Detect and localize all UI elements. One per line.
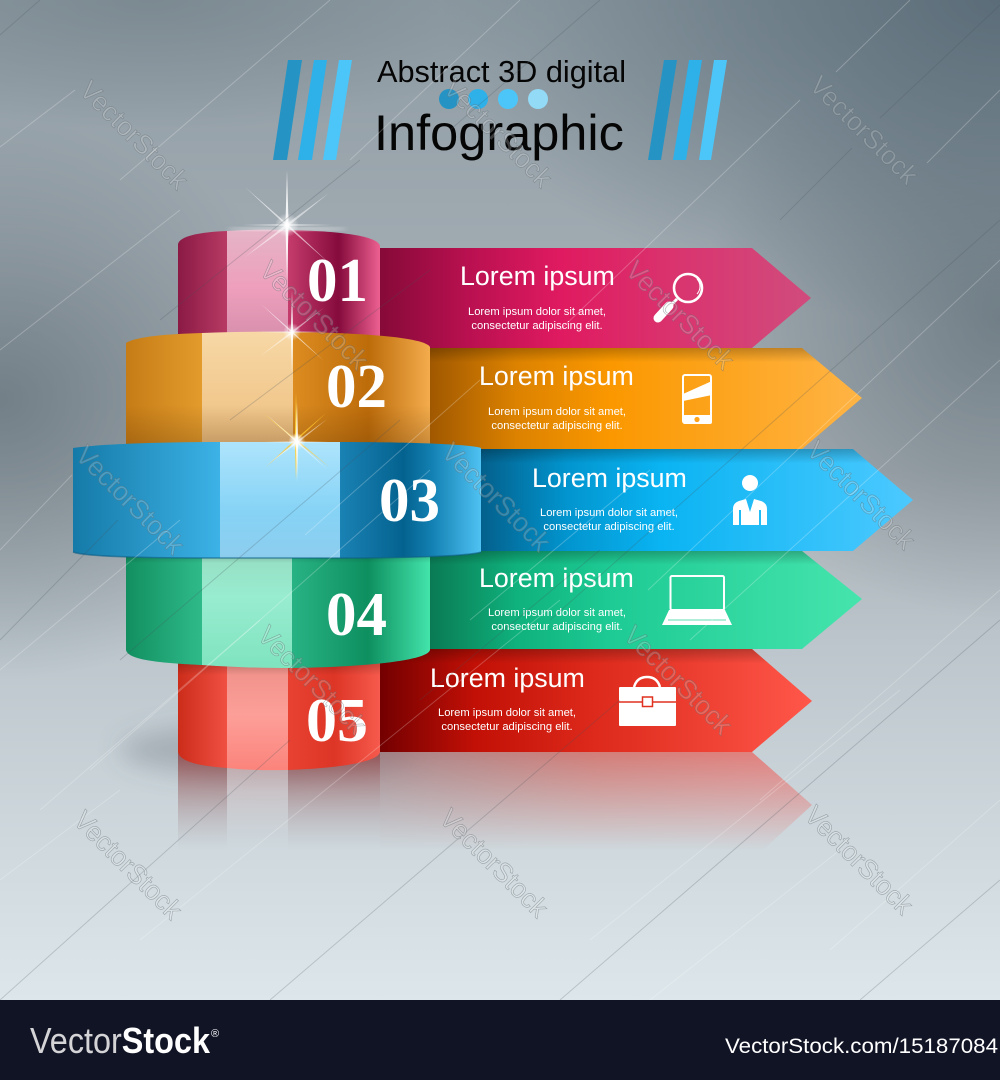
footer logo: VectorStock — [30, 1020, 211, 1061]
cylinder 2: orange — [126, 332, 430, 445]
watermark text: VectorStock — [434, 803, 554, 924]
footer bar — [0, 1000, 1000, 1080]
watermark text: VectorStock — [254, 255, 374, 376]
sparkle at cylinder 2 base — [262, 392, 330, 480]
cylinder reflection — [178, 752, 380, 850]
arrow 2 body text: consectetur adipiscing elit. — [491, 420, 623, 432]
watermark text: VectorStock — [804, 70, 924, 191]
arrow 1 body text: Lorem ipsum dolor sit amet, — [468, 306, 606, 318]
icon: business person — [733, 475, 767, 525]
footer image id: VectorStock.com/15187084 — [725, 1035, 998, 1058]
watermark text: VectorStock — [436, 437, 556, 558]
arrow reflection — [380, 752, 812, 842]
icon: briefcase — [619, 677, 676, 726]
cylinder 5: red — [178, 660, 380, 770]
arrow 4 heading: Lorem ipsum — [479, 563, 634, 593]
watermark text: VectorStock — [620, 255, 740, 376]
watermark text: VectorStock — [801, 435, 921, 556]
number 03: 03 — [379, 467, 440, 535]
arrow 4 body text: consectetur adipiscing elit. — [491, 621, 623, 633]
registered mark: ® — [211, 1028, 219, 1040]
arrow 2 heading: Lorem ipsum — [479, 361, 634, 391]
arrow 5 body text: consectetur adipiscing elit. — [441, 721, 573, 733]
icon: laptop — [662, 576, 732, 625]
watermark text: VectorStock — [70, 440, 190, 561]
arrow 5 heading: Lorem ipsum — [430, 663, 585, 693]
arrow 1 body text: consectetur adipiscing elit. — [471, 320, 603, 332]
number 01: 01 — [307, 247, 368, 315]
cylinder 1: crimson — [178, 230, 380, 336]
watermark text: VectorStock — [74, 75, 194, 196]
arrow 5 body text: Lorem ipsum dolor sit amet, — [438, 707, 576, 719]
arrow 4 body text: Lorem ipsum dolor sit amet, — [488, 607, 626, 619]
arrow 1: crimson — [380, 248, 811, 348]
floor shadow under stack — [120, 722, 420, 778]
number 05: 05 — [306, 687, 368, 755]
arrow 3: blue — [481, 449, 913, 551]
reflection of the stack on the floor — [178, 752, 812, 842]
arrow 3 body text: consectetur adipiscing elit. — [543, 521, 675, 533]
title right stripes — [648, 60, 727, 160]
arrow 3 heading: Lorem ipsum — [532, 463, 687, 493]
arrow 2: orange — [430, 348, 862, 449]
sparkle on cylinder 1 — [242, 170, 332, 280]
arrow 2 body text: Lorem ipsum dolor sit amet, — [488, 406, 626, 418]
number 04: 04 — [326, 581, 387, 649]
title left stripes — [273, 60, 352, 160]
watermark text: VectorStock — [799, 800, 919, 921]
sparkle on cylinder 2 — [258, 291, 326, 373]
icon: smartphone — [683, 375, 712, 424]
decorative dots — [439, 89, 548, 109]
subtitle: Abstract 3D digital — [377, 54, 626, 89]
sparkle on cylinder 3 — [265, 402, 329, 482]
cylinder 4: green — [126, 550, 430, 668]
sparkle highlights — [227, 170, 347, 482]
cylinder 3: blue — [73, 442, 481, 558]
main title: Infographic — [374, 104, 624, 161]
watermark text: VectorStock — [252, 620, 372, 741]
title block — [273, 54, 727, 161]
arrow 4: green — [430, 551, 862, 649]
icon: magnifying glass — [658, 274, 702, 318]
arrow 3 body text: Lorem ipsum dolor sit amet, — [540, 507, 678, 519]
arrow 1 heading: Lorem ipsum — [460, 261, 615, 291]
number 02: 02 — [326, 353, 387, 421]
watermark text — [68, 70, 924, 926]
watermark text: VectorStock — [618, 620, 738, 741]
watermark text: VectorStock — [68, 805, 188, 926]
arrow 5: red — [380, 649, 812, 752]
watermark text: VectorStock — [438, 73, 558, 194]
